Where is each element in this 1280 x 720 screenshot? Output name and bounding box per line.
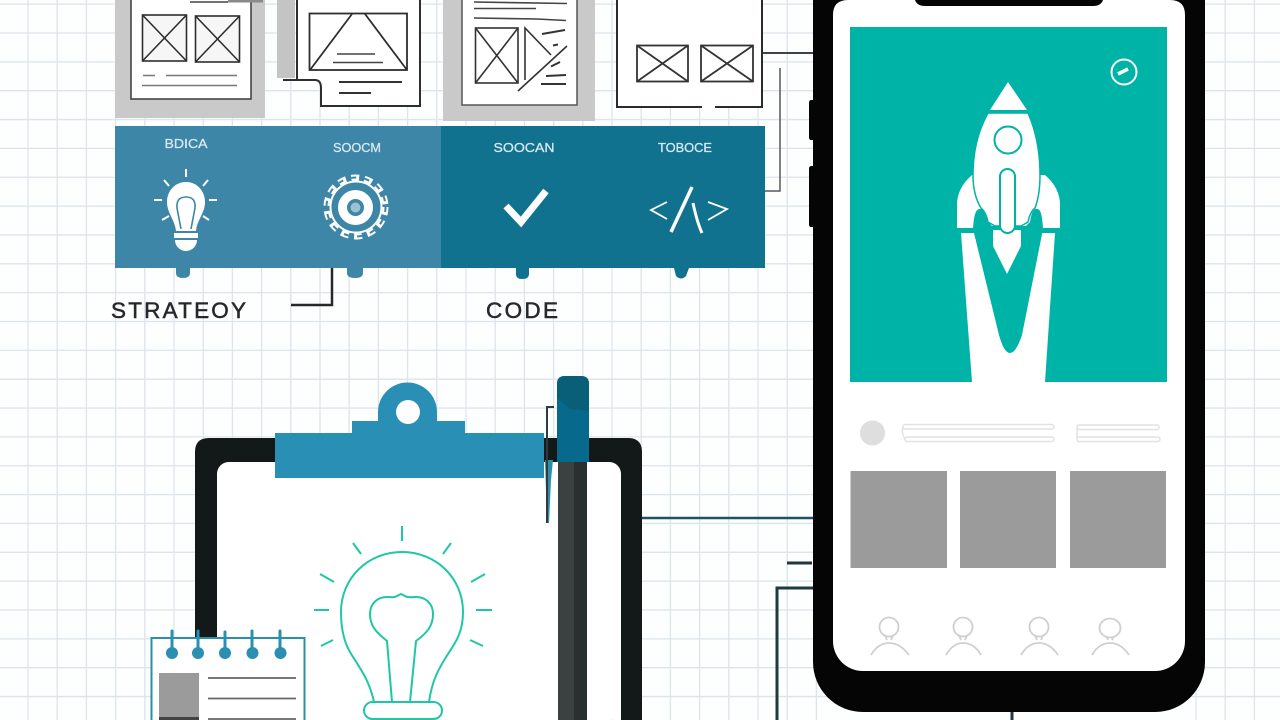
rocket inner flame cut-out	[973, 209, 1043, 353]
label: third step: SOOCAN	[494, 140, 554, 155]
label: second step: SOOCM	[333, 140, 381, 155]
image thumbnails	[850, 471, 1166, 568]
phone notch	[915, 0, 1103, 6]
pen	[545, 376, 589, 720]
icon: check mark	[506, 191, 546, 222]
smartphone	[809, 0, 1205, 712]
wireframe sheet 2	[277, 0, 420, 106]
wireframe sheet 4	[617, 0, 762, 107]
icon: code brackets	[651, 187, 727, 233]
phone screen	[833, 0, 1185, 671]
rocket fins	[957, 175, 1060, 228]
icon: light bulb	[154, 169, 217, 251]
hero panel	[850, 27, 1167, 382]
panel: right banner section	[441, 126, 765, 268]
clipboard board	[195, 438, 642, 720]
heading: strategy: STRATEOY	[111, 298, 246, 323]
icon: rocket	[957, 82, 1060, 382]
wireframe sheet 1	[115, 0, 265, 118]
illustration: outlined light bulb	[314, 526, 492, 719]
icon: gear	[326, 178, 386, 236]
profile row	[860, 420, 1160, 446]
label: fourth step: TOBOCE	[658, 140, 712, 155]
clipboard paper	[217, 462, 621, 720]
user icons	[871, 618, 1129, 655]
icon: small badge	[1112, 60, 1136, 84]
process banner	[115, 126, 765, 279]
connector lines	[291, 53, 1012, 720]
rocket porthole	[994, 126, 1022, 154]
rocket body	[973, 113, 1040, 226]
notebook image block	[159, 673, 199, 717]
notebook	[152, 631, 304, 720]
rocket flame	[993, 230, 1021, 274]
side buttons	[809, 100, 813, 227]
heading: code: CODE	[486, 298, 558, 323]
wireframe sheet 3	[443, 0, 595, 121]
clipboard	[152, 376, 642, 720]
rocket slot	[1000, 169, 1015, 233]
banner tabs	[176, 268, 689, 279]
rocket exhaust	[961, 233, 1055, 382]
notebook dark strip	[159, 717, 199, 720]
notebook text lines	[208, 678, 296, 719]
label: first step: BDICA	[164, 136, 208, 151]
clipboard clip	[275, 382, 544, 478]
panel: left banner section	[115, 126, 441, 268]
phone body	[813, 0, 1205, 712]
notebook rings	[166, 631, 286, 659]
rocket nose	[990, 82, 1027, 110]
